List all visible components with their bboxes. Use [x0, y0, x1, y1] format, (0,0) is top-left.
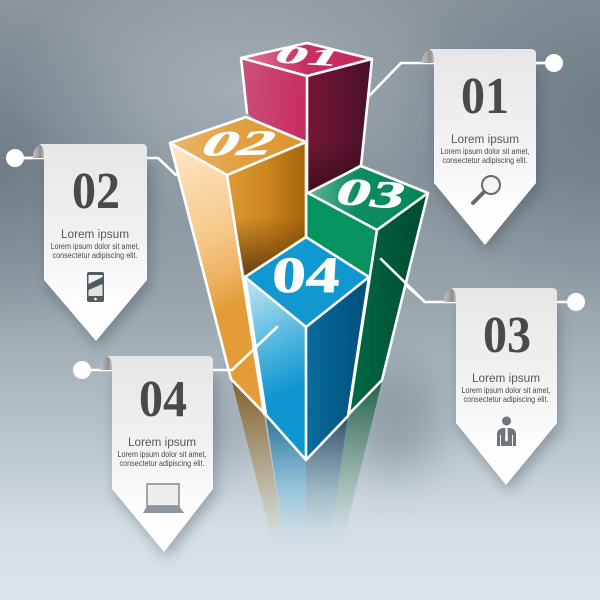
number 02: 02 [192, 124, 286, 164]
connector 04 and callout tick 03 [90, 259, 425, 370]
panel: banner 03 [444, 288, 585, 491]
number 04 heading: 04 [139, 371, 187, 428]
curl 01 [422, 49, 436, 63]
text: 04 [118, 437, 206, 468]
text: 02: consectetur adipiscing elit. [52, 251, 138, 260]
text: 02: Lorem ipsum dolor sit amet, [50, 242, 140, 251]
curl 04 [100, 356, 114, 370]
number 03 heading: 03 [483, 307, 531, 364]
bar 03 green [306, 166, 428, 415]
icon: laptop [143, 484, 184, 513]
reflections beneath bars [232, 381, 382, 545]
panel: banner 02 [6, 144, 150, 347]
connector lines [24, 63, 577, 302]
text: 03: Lorem ipsum dolor sit amet, [462, 386, 550, 395]
bar 02 amber [170, 117, 306, 414]
text: 04: Lorem ipsum [128, 437, 196, 449]
knob 03 [567, 293, 585, 311]
text: 01: Lorem ipsum [451, 134, 519, 146]
knob 02 [6, 149, 33, 167]
text: 01: Lorem ipsum dolor sit amet, [440, 147, 530, 156]
text: 02: Lorem ipsum [61, 229, 129, 241]
knob 04 [73, 361, 91, 379]
number 02 heading: 02 [72, 163, 120, 220]
panel: banner 04 [73, 356, 216, 558]
curl 03 [444, 288, 458, 302]
text: 03 [462, 373, 550, 404]
curl 02 [33, 144, 46, 158]
bar 04 blue [243, 237, 369, 460]
number 04: 04 [271, 247, 342, 303]
text: 04: Lorem ipsum dolor sit amet, [118, 450, 206, 459]
text: 01 [440, 134, 530, 165]
icon: businessman [497, 416, 516, 446]
icon: magnifier [473, 176, 500, 203]
number 01: 01 [268, 41, 349, 71]
icon: phone [87, 272, 104, 302]
text: 01: consectetur adipiscing elit. [442, 156, 528, 165]
text: 02 [50, 229, 140, 260]
text: 04: consectetur adipiscing elit. [120, 459, 204, 468]
bar 01 crimson [241, 41, 372, 195]
text: 03: Lorem ipsum [472, 373, 540, 385]
number 01 heading: 01 [461, 68, 509, 125]
text: 03: consectetur adipiscing elit. [464, 395, 548, 404]
number 03: 03 [329, 171, 413, 217]
panel: banner 01 [422, 49, 563, 251]
knob 01 [536, 54, 563, 72]
